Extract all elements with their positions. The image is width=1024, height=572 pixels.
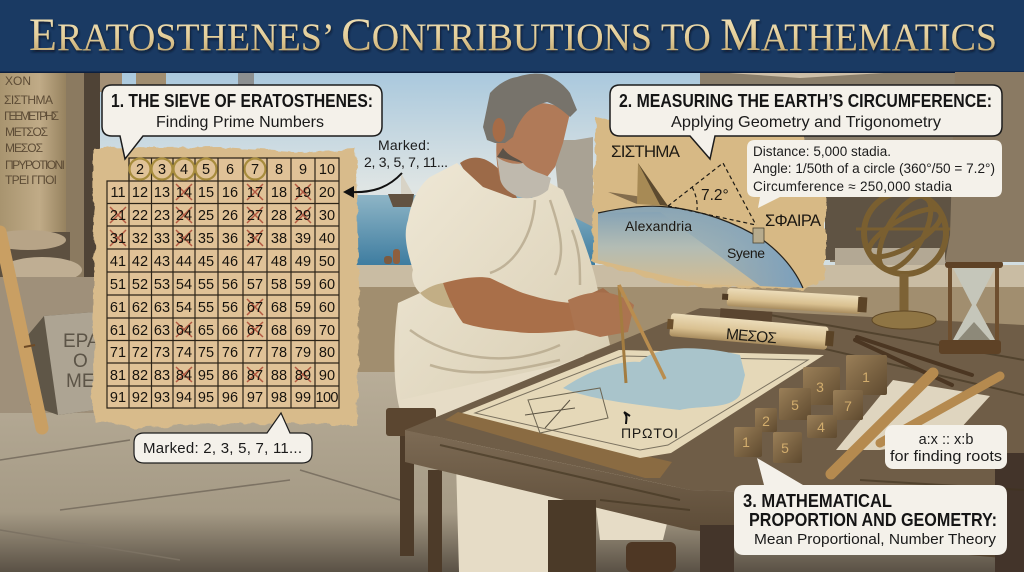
grid numbers: 39 [295,231,311,247]
grid numbers: 52 [132,277,148,293]
grid numbers: 11 [110,185,126,201]
grid numbers: 33 [154,231,170,247]
grid numbers: 91 [110,390,126,406]
left hand [645,332,690,362]
stone tablet: Ο [73,351,88,372]
grid numbers: 60 [319,300,335,316]
grid numbers: 70 [319,323,335,339]
panel 2: earth measurement parchment: 7.2° [701,187,729,204]
robe lower [394,303,680,572]
well at Syene [753,228,764,243]
grid numbers: 38 [271,231,287,247]
grid numbers: 44 [176,254,192,270]
grid numbers: 12 [132,185,148,201]
grid numbers: 30 [319,208,335,224]
grid numbers: 24 [176,208,192,224]
rulers [831,373,1000,474]
number cubes: 2 [762,413,770,429]
note: marked numbers with arrow [343,137,448,198]
grid numbers: 5 [202,162,210,178]
callout: calculation details [747,140,1002,208]
grid numbers: 88 [271,368,287,384]
left column with Greek inscription: ΧΟΝ [5,74,31,88]
grid numbers: 67 [247,300,263,316]
number cubes [734,355,887,463]
title: ERATOSTHENES’ CONTRIBUTIONS TO MATHEMATICS [29,9,997,61]
geometry lines [668,163,756,225]
callout: calculation details: Angle: 1/50th of a circle (360°/50 = 7.2°) [753,161,995,176]
title banner [0,0,1024,73]
grid numbers: 87 [247,368,263,384]
grid numbers: 2 [136,162,144,178]
grid numbers: 36 [222,231,238,247]
panel 2: earth measurement parchment: Syene [727,245,765,261]
number cubes: 1 [742,434,750,450]
left column with Greek inscription: ΣΙΣΤΗΜΑ [4,93,53,107]
grid numbers: 72 [132,345,148,361]
grid numbers: 45 [198,254,214,270]
callout: sieve heading: Finding Prime Numbers [156,114,324,131]
grid numbers: 34 [176,231,192,247]
grid numbers: 63 [154,323,170,339]
grid numbers: 71 [110,345,126,361]
low wall [355,265,1024,377]
callout: mean proportional formula [885,425,1007,469]
stool [386,408,442,572]
grid numbers: 23 [154,208,170,224]
grid numbers: 76 [222,345,238,361]
grid numbers: 92 [132,390,148,406]
grid numbers: 67 [247,323,263,339]
grid numbers: 7 [251,162,259,178]
grid numbers: 56 [222,277,238,293]
neck [460,158,517,198]
grid numbers: 79 [295,345,311,361]
grid numbers: 64 [176,323,192,339]
grid numbers: 84 [176,368,192,384]
grid numbers: 59 [295,277,311,293]
right column [945,72,1024,262]
grid numbers: 55 [198,300,214,316]
grid numbers: 14 [176,185,192,201]
grid numbers: 97 [247,390,263,406]
hourglass [939,261,1003,354]
number cubes: 7 [844,398,852,414]
grid numbers: 4 [180,162,188,178]
left column with Greek inscription: ΠΡΥΡΟΤΙΟΝΙ [5,158,65,172]
callout: sieve heading [102,85,382,159]
parchment notes under rulers [836,380,990,450]
panel 1: sieve of Eratosthenes parchment grid [93,147,359,428]
number cubes: 5 [781,440,789,456]
left column with Greek inscription: ΓΕΕΜΕΤΡΗΣ [4,109,59,123]
grid cells [107,158,339,408]
grid numbers: 68 [271,323,287,339]
grid numbers: 95 [198,368,214,384]
grid numbers: 17 [247,185,263,201]
head [496,103,570,190]
grid numbers: 15 [198,185,214,201]
grid numbers: 40 [319,231,335,247]
grid numbers: 6 [226,162,234,178]
scrolls [666,288,867,350]
grid numbers: 96 [222,390,238,406]
grid numbers: 49 [295,254,311,270]
stone tablet: ΕΡΑ [63,331,100,352]
grid numbers: 26 [222,208,238,224]
grid numbers: 10 [319,162,335,178]
sleeve hem [420,283,455,308]
grid numbers: 16 [222,185,238,201]
number cubes: 5 [791,397,799,413]
grid numbers: 29 [295,208,311,224]
stone tablet [28,312,100,415]
grid numbers: 22 [132,208,148,224]
grid numbers: 75 [198,345,214,361]
grid numbers: 100 [316,390,338,406]
grid numbers: 77 [247,345,263,361]
grid numbers: 19 [295,185,311,201]
grid numbers: 90 [319,368,335,384]
grid numbers: 68 [271,300,287,316]
grid numbers: 94 [176,390,192,406]
parchment [592,118,826,289]
grid numbers: 62 [132,323,148,339]
callout: calculation details: Distance: 5,000 stadia. [753,144,891,159]
parchment [93,147,359,428]
grid numbers: 82 [132,368,148,384]
grid numbers: 78 [271,345,287,361]
grid numbers: 99 [295,390,311,406]
grid numbers: 28 [271,208,287,224]
grid numbers [110,162,338,406]
grid numbers: 55 [198,277,214,293]
map label: ΠΡΩΤΟΙ [621,425,678,441]
scroll label: ΜΕΣΟΣ [725,326,778,347]
grid numbers: 80 [319,345,335,361]
grid numbers: 53 [154,277,170,293]
grid numbers: 56 [222,300,238,316]
grid numbers: 13 [154,185,170,201]
callout: mean proportional formula: for finding roots [890,448,1002,465]
grid numbers: 59 [295,300,311,316]
left column with Greek inscription: ΜΕΣΟΣ [5,141,43,155]
grid numbers: 86 [222,368,238,384]
grid numbers: 21 [110,208,126,224]
grid numbers: 37 [247,231,263,247]
grid numbers: 81 [110,368,126,384]
callout: calculation details: Circumference ≈ 250,000 stadia [753,179,952,194]
grid numbers: 27 [247,208,263,224]
callout: mean proportional formula: a:x :: x:b [919,432,973,448]
callout: proportion and geometry heading [734,458,1007,555]
figures on the wall [384,249,400,264]
gnomon [608,163,668,206]
note: marked numbers with arrow: 2, 3, 5, 7, 11... [364,154,448,170]
sandal [626,542,676,572]
grid numbers: 54 [176,300,192,316]
panel 2: earth measurement parchment: ΣΦΑΙΡΑ [765,212,821,230]
grid numbers: 20 [319,185,335,201]
grid numbers: 46 [222,254,238,270]
far arm [583,288,625,325]
wooden staff [0,232,42,428]
sailing boat [388,173,414,207]
grid numbers: 89 [295,368,311,384]
labels: ΣΙΣΤΗΜΑ [611,142,681,161]
callout: marked list [134,413,312,463]
callout: proportion and geometry heading: Mean Proportional, Number Theory [754,531,997,548]
grid numbers: 61 [110,300,126,316]
crossed-out marks [110,184,311,382]
note: marked numbers with arrow: Marked: [378,137,430,153]
compass [619,285,665,383]
grid numbers: 60 [319,277,335,293]
armillary sphere [856,188,955,329]
grid numbers: 43 [154,254,170,270]
beard [497,157,551,198]
callout: sieve heading: 1. THE SIEVE OF ERATOSTHENES: [111,91,373,111]
grid numbers: 95 [198,390,214,406]
panel 2: earth measurement parchment [592,118,826,289]
grid numbers: 63 [154,300,170,316]
callout: circumference heading: Applying Geometry and Trigonometry [671,114,941,131]
grid numbers: 25 [198,208,214,224]
arm [443,277,578,333]
grid numbers: 31 [110,231,126,247]
grid numbers: 51 [110,277,126,293]
sticks [855,337,972,385]
prime circles [130,158,266,180]
grid numbers: 8 [275,162,283,178]
grid numbers: 73 [154,345,170,361]
grid numbers: 41 [110,254,126,270]
grid numbers: 48 [271,254,287,270]
arrow [343,173,402,198]
earth curve [598,206,803,288]
grid numbers: 98 [271,390,287,406]
hand on compass [568,292,634,337]
stone tablet: ΜΕ [66,371,94,392]
grid numbers: 32 [132,231,148,247]
grid numbers: 18 [271,185,287,201]
left column with Greek inscription: ΤΡΕΙ ΓΠΟΙ [5,173,57,187]
grid numbers: 50 [319,254,335,270]
grid numbers: 61 [110,323,126,339]
grid numbers: 54 [176,277,192,293]
number cubes: 4 [817,419,825,435]
grid numbers: 57 [247,277,263,293]
grid numbers: 47 [247,254,263,270]
grid numbers: 74 [176,345,192,361]
grid numbers: 9 [299,162,307,178]
grid numbers: 42 [132,254,148,270]
left column with Greek inscription [0,72,122,413]
grid numbers: 66 [222,323,238,339]
ear [492,118,506,142]
callout: circumference heading [610,85,1002,159]
map on table [445,348,824,478]
callout: proportion and geometry heading: PROPORTION AND GEOMETRY: [749,510,997,530]
callout: marked list: Marked: 2, 3, 5, 7, 11... [143,440,302,457]
grid numbers: 83 [154,368,170,384]
grid numbers: 62 [132,300,148,316]
callout: proportion and geometry heading: 3. MATHEMATICAL [743,491,892,511]
hair [483,74,577,143]
man: Eratosthenes [394,74,690,572]
number cubes: 1 [862,369,870,385]
grid numbers: 35 [198,231,214,247]
grid numbers: 69 [295,323,311,339]
panel 2: earth measurement parchment: Alexandria [625,218,692,234]
table [405,308,1024,572]
grid numbers: 93 [154,390,170,406]
number cubes: 3 [816,379,824,395]
grid numbers: 65 [198,323,214,339]
grid numbers: 3 [158,162,166,178]
left column with Greek inscription: ΜΕΤΣΟΣ [5,125,48,139]
grid numbers: 58 [271,277,287,293]
tunic [398,163,610,400]
